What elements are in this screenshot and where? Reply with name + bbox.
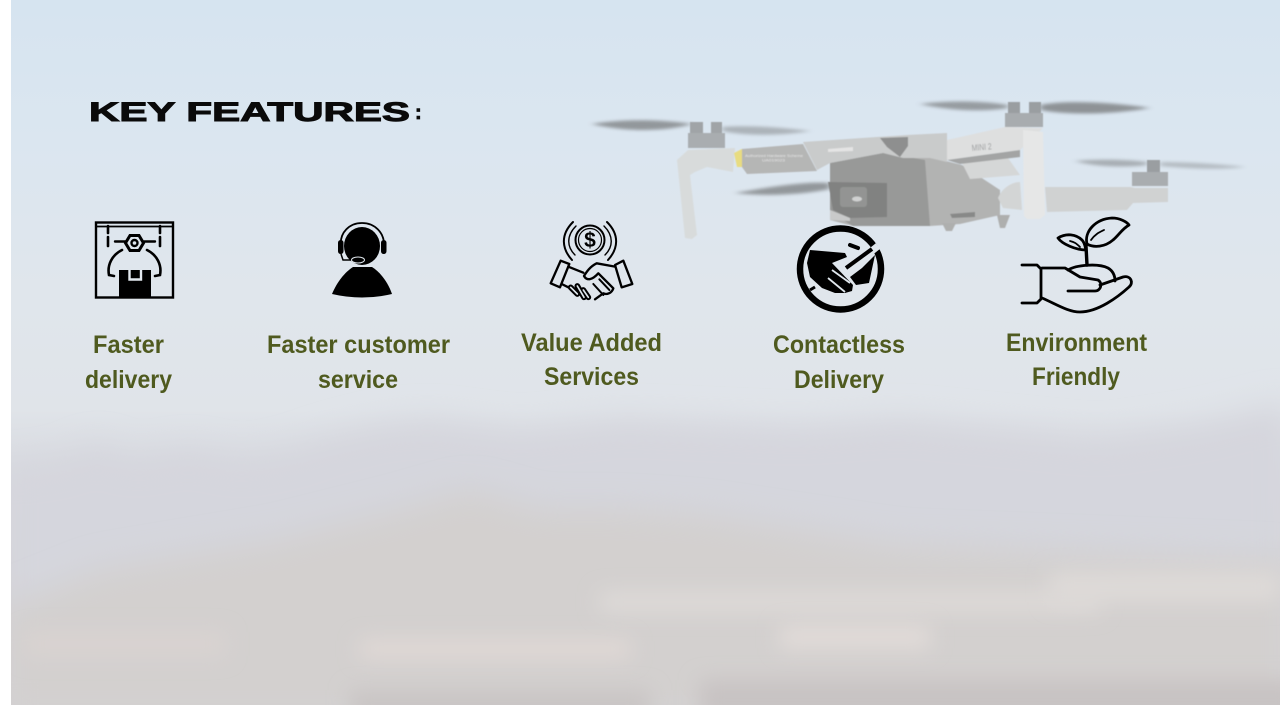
rear motor: [1132, 172, 1168, 186]
label: Faster customer: [267, 331, 450, 359]
label: [267, 331, 450, 394]
feature: contactless delivery: [773, 228, 905, 394]
icon: headset agent: [332, 223, 392, 298]
propeller blur: [592, 101, 1245, 195]
sticker text: Authorized Hardware Scheme: [745, 153, 804, 158]
feature: faster delivery: [85, 222, 173, 394]
label: Environment: [1006, 329, 1148, 357]
label: [521, 329, 662, 391]
body top shell: [803, 133, 947, 170]
front left dark arm: [742, 144, 817, 174]
icon: hand holding sprout: [1022, 218, 1131, 312]
yellow sticker: [734, 149, 742, 167]
right motor: [1005, 113, 1043, 127]
title colon: :: [415, 102, 422, 124]
icon: handshake with dollar coin: [551, 222, 632, 299]
title: KEY FEATURES: [89, 97, 410, 127]
left motor: [688, 133, 725, 148]
feature: value added services: [521, 222, 662, 391]
feature: faster customer service: [267, 223, 450, 394]
feature: environment friendly: [1006, 218, 1148, 391]
label: Faster: [93, 331, 164, 359]
drone photo: [592, 101, 1245, 239]
left arm and leg: [677, 148, 735, 239]
icon: handshake with dollar coin: $: [584, 229, 596, 252]
label: Services: [544, 363, 639, 391]
feet: [942, 215, 1010, 231]
model marking: MINI 2: [971, 141, 992, 153]
label: [85, 331, 172, 394]
drone photo: UA019023: [762, 158, 786, 162]
label: Contactless: [773, 331, 905, 359]
label: [1006, 329, 1148, 391]
label: [773, 331, 905, 394]
label: delivery: [85, 366, 172, 394]
rear right arm: [1045, 187, 1168, 212]
body dark lower: [830, 153, 1000, 226]
label: service: [318, 366, 398, 394]
label: Value Added: [521, 329, 662, 357]
right leg: [1023, 130, 1045, 219]
label: Friendly: [1032, 363, 1120, 391]
body side and inner arm: [962, 158, 1020, 179]
icon: drone carrying package: [96, 222, 173, 298]
camera: [828, 182, 887, 218]
right top arm: [947, 127, 1043, 160]
label: Delivery: [794, 366, 884, 394]
icon: crossed out handshake: [800, 228, 881, 310]
